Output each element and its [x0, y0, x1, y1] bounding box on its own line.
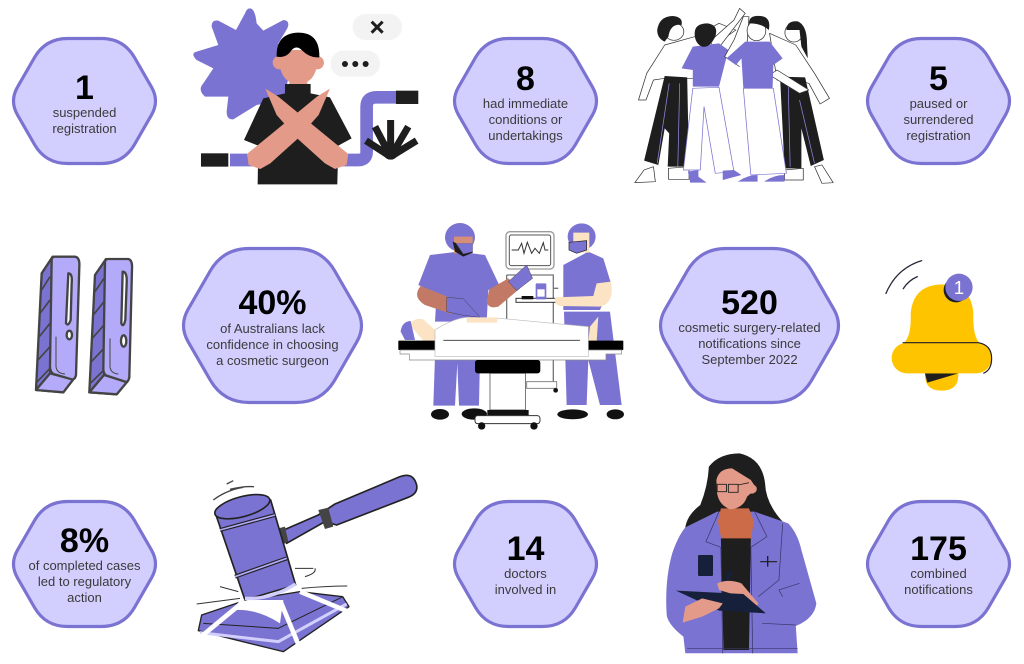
stat hexagon: 14 doctors involved	[454, 502, 596, 626]
stat hexagon: 8 percent regulatory action: action	[67, 590, 102, 605]
stat hexagon: 1 suspended registration: registration	[52, 121, 117, 136]
stat hexagon: 8 percent regulatory action: 8%	[60, 522, 109, 560]
stat hexagon: 8 percent regulatory action: led to regulatory	[38, 574, 132, 589]
stat hexagon: 175 combined notifications: 175	[910, 530, 967, 568]
icon: two purple exclamation bars	[36, 257, 132, 394]
stat hexagon: 14 doctors involved: 14	[507, 530, 544, 568]
stat hexagon: 175 combined notifications	[868, 502, 1010, 626]
icon: person crossing arms to refuse	[193, 8, 418, 184]
stat hexagon: 40 percent lack confidence: 40%	[238, 284, 307, 322]
stat hexagon: 175 combined notifications: notifications	[904, 582, 973, 597]
stat hexagon: 8 percent regulatory action	[14, 502, 156, 626]
stat hexagon: 5 paused or surrendered: registration	[906, 128, 971, 143]
stat hexagon: 40 percent lack confidence: a cosmetic surgeon	[216, 353, 329, 368]
stat hexagon: 40 percent lack confidence: of Australians lack	[220, 321, 325, 336]
stat hexagon: 5 paused or surrendered	[868, 38, 1010, 164]
icon: gavel striking a block	[195, 475, 417, 652]
stat hexagon: 1 suspended registration: 1	[75, 69, 94, 107]
stat hexagon: 5 paused or surrendered: surrendered	[903, 112, 974, 127]
stat hexagon: 520 notifications: cosmetic surgery-related	[678, 320, 821, 335]
stat hexagon: 40 percent lack confidence	[184, 248, 362, 402]
icon: yellow notification bell	[886, 261, 992, 391]
stat hexagon: 14 doctors involved: doctors	[504, 566, 547, 581]
stat hexagon: 40 percent lack confidence: confidence in choosing	[206, 337, 339, 352]
stat hexagon: 5 paused or surrendered: paused or	[910, 96, 968, 111]
stat hexagon: 8 immediate conditions	[454, 38, 596, 164]
stat hexagon: 8 immediate conditions: had immediate	[483, 96, 568, 111]
stat hexagon: 8 immediate conditions: conditions or	[489, 112, 563, 127]
icon: yellow notification bell: 1	[954, 277, 964, 298]
stat hexagon: 520 notifications: notifications since	[698, 336, 801, 351]
stat hexagon: 1 suspended registration: suspended	[53, 105, 116, 120]
stat hexagon: 8 immediate conditions: undertakings	[488, 128, 563, 143]
stat hexagon: 520 notifications	[660, 248, 838, 402]
icon: surgical team operating on a patient	[398, 223, 624, 430]
stat hexagon: 8 immediate conditions: 8	[516, 60, 535, 98]
stat hexagon: 1 suspended registration	[14, 38, 156, 164]
icon: doctor in purple coat with clipboard	[666, 453, 816, 653]
icon: four people high-fiving	[635, 8, 833, 183]
stat hexagon: 5 paused or surrendered: 5	[929, 60, 948, 98]
stat hexagon: 8 percent regulatory action: of completed cases	[28, 558, 141, 573]
stat hexagon: 14 doctors involved: involved in	[495, 582, 556, 597]
stat hexagon: 520 notifications: 520	[721, 284, 778, 322]
stat hexagon: 175 combined notifications: combined	[910, 566, 967, 581]
stat hexagon: 520 notifications: September 2022	[701, 352, 798, 367]
